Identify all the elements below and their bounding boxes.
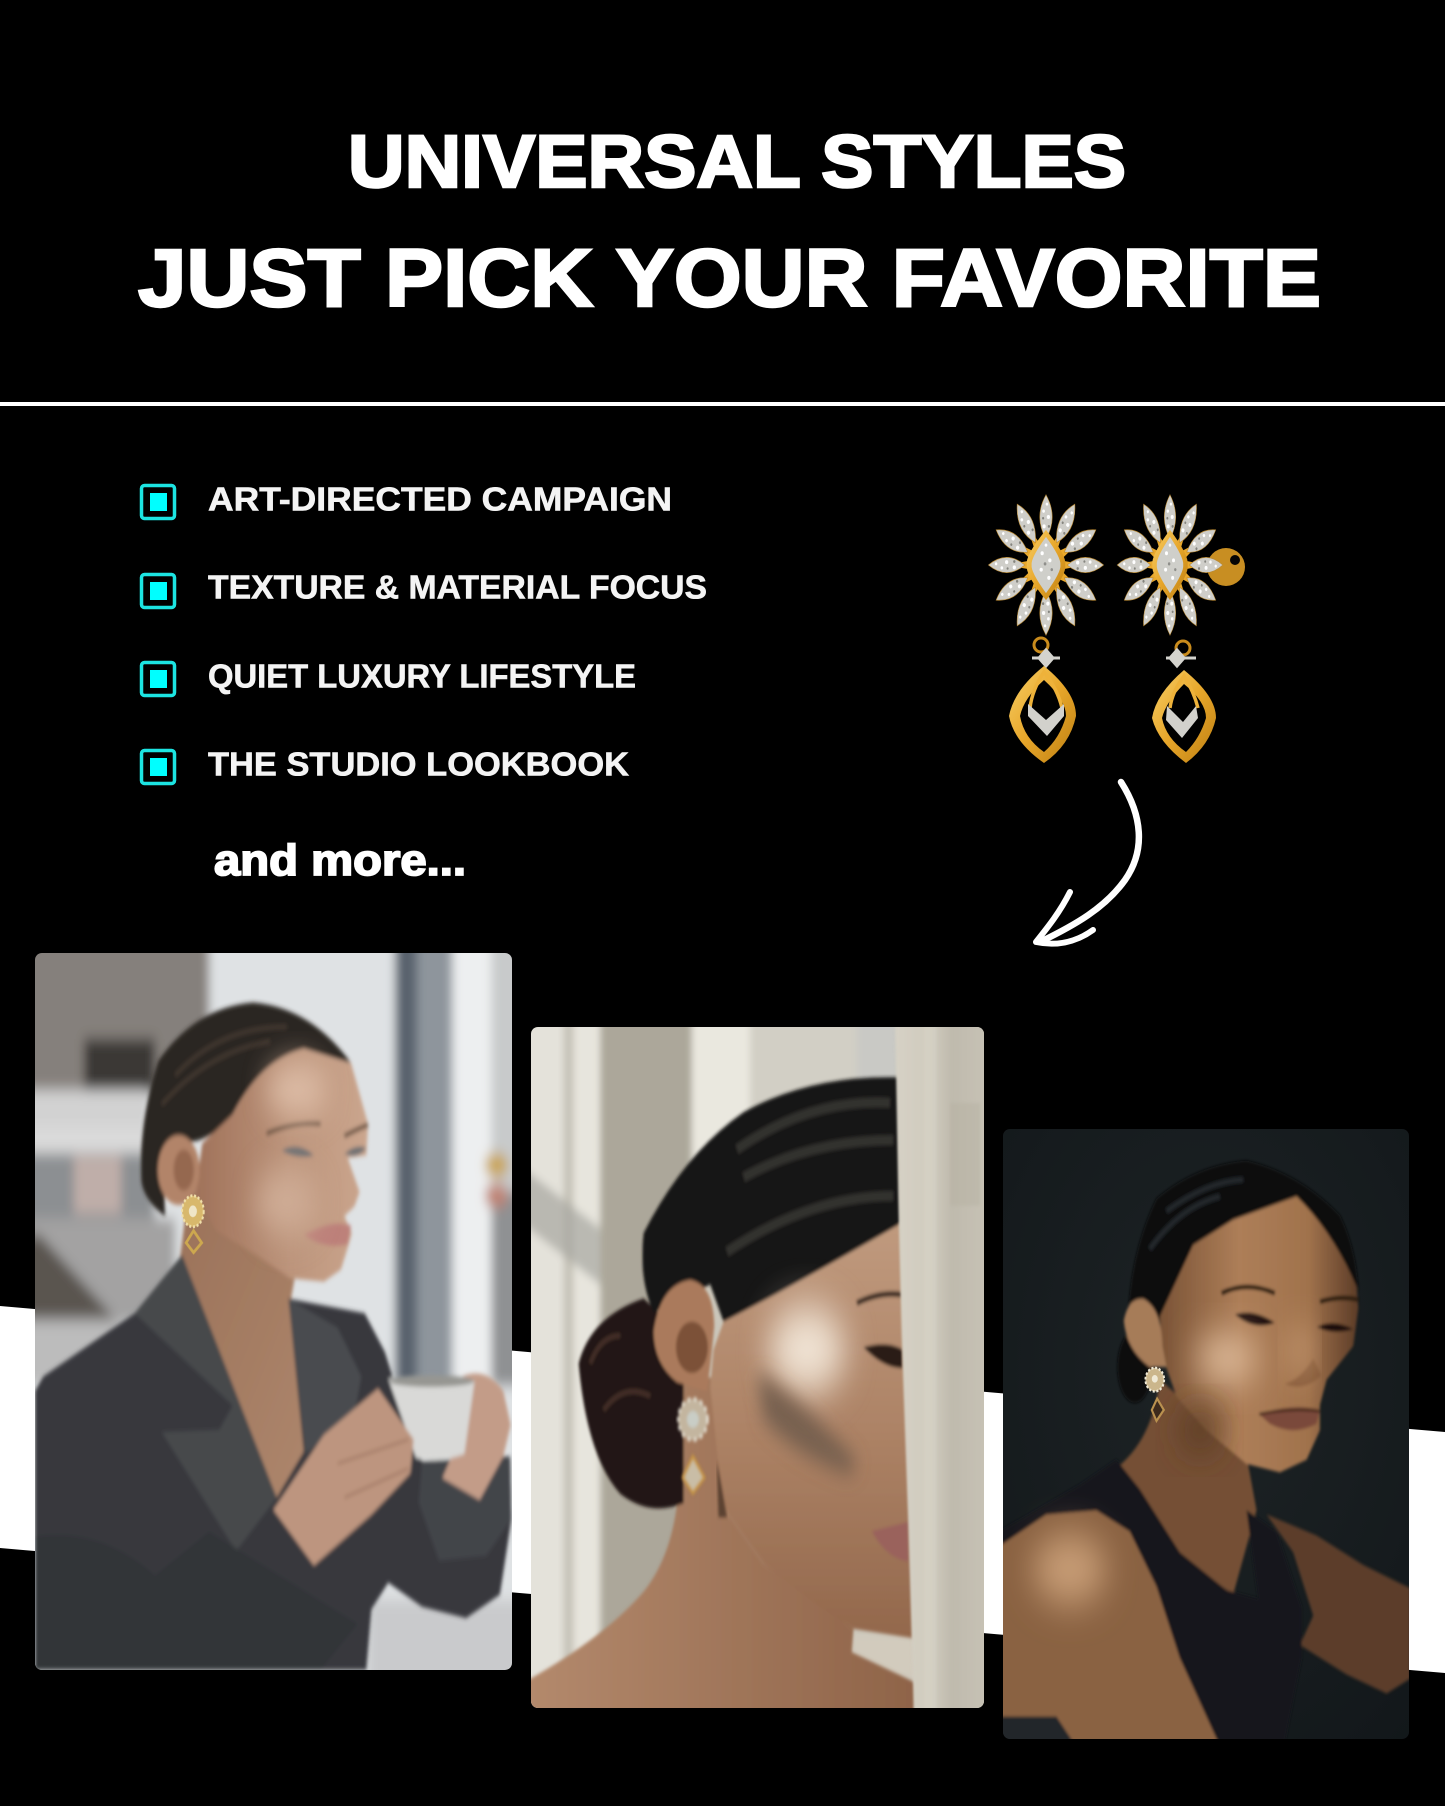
list item: the studio lookbook: THE STUDIO LOOKBOOK xyxy=(208,746,629,782)
subject xyxy=(35,1003,511,1670)
black dress xyxy=(1000,1460,1302,1742)
ear xyxy=(654,1280,714,1391)
title: UNIVERSAL STYLES xyxy=(348,120,1126,203)
subject xyxy=(524,1077,915,1717)
background xyxy=(1003,1129,1409,1739)
list item: quiet luxury lifestyle: QUIET LUXURY LIFESTYLE xyxy=(208,658,636,694)
face xyxy=(710,1224,913,1638)
neck and shoulders xyxy=(524,1378,915,1717)
ear xyxy=(1124,1299,1166,1367)
blazer xyxy=(35,1255,511,1670)
table hand and cup xyxy=(442,1374,511,1500)
neck and chest xyxy=(179,1187,305,1503)
earring xyxy=(1145,1368,1164,1421)
background: cafe interior and window xyxy=(20,930,527,1687)
brows and eyes xyxy=(267,1123,368,1136)
feature list xyxy=(140,480,707,885)
and more text: and more... xyxy=(214,836,466,885)
nose shadow xyxy=(1285,1359,1322,1387)
face xyxy=(1160,1196,1358,1472)
subject xyxy=(1000,1161,1410,1742)
lapels xyxy=(135,1255,277,1551)
right cuff xyxy=(419,1456,511,1561)
white diagonal band xyxy=(0,1306,1445,1673)
photo: woman beside linen curtain xyxy=(531,1027,984,1708)
neck xyxy=(1116,1380,1257,1595)
lips xyxy=(304,1224,351,1246)
skin highlights xyxy=(1033,1325,1310,1605)
eyes xyxy=(1235,1312,1353,1332)
face xyxy=(196,1049,368,1282)
arrow xyxy=(1033,778,1142,947)
hair bun xyxy=(579,1298,684,1508)
photo: studio portrait on dark background xyxy=(1003,1129,1409,1739)
earring xyxy=(678,1399,708,1493)
far arm xyxy=(1267,1514,1410,1694)
title xyxy=(138,120,1321,320)
skin shading xyxy=(256,1063,327,1236)
eye, brow, lips xyxy=(857,1294,902,1303)
lips xyxy=(1259,1407,1320,1430)
hair xyxy=(141,1003,351,1216)
list item: texture and material focus: TEXTURE & MATERIAL FOCUS xyxy=(208,568,707,606)
list item: art-directed campaign: ART-DIRECTED CAMPAIGN xyxy=(208,480,672,518)
earring xyxy=(182,1196,204,1253)
brows xyxy=(1222,1287,1358,1302)
right earring xyxy=(1117,495,1245,763)
hair xyxy=(642,1077,900,1322)
ear xyxy=(158,1135,200,1205)
divider line xyxy=(0,402,1445,406)
background: window sheers xyxy=(510,1010,997,1727)
left earring xyxy=(988,495,1104,763)
bun xyxy=(1117,1331,1152,1403)
near shoulder xyxy=(1000,1510,1218,1742)
hair xyxy=(1128,1161,1358,1321)
photo: woman in grey blazer with coffee cup xyxy=(35,953,512,1670)
linen curtain xyxy=(895,1019,990,1717)
cheek highlight and shadow xyxy=(717,1305,857,1517)
product: gold and diamond earrings xyxy=(988,494,1245,763)
